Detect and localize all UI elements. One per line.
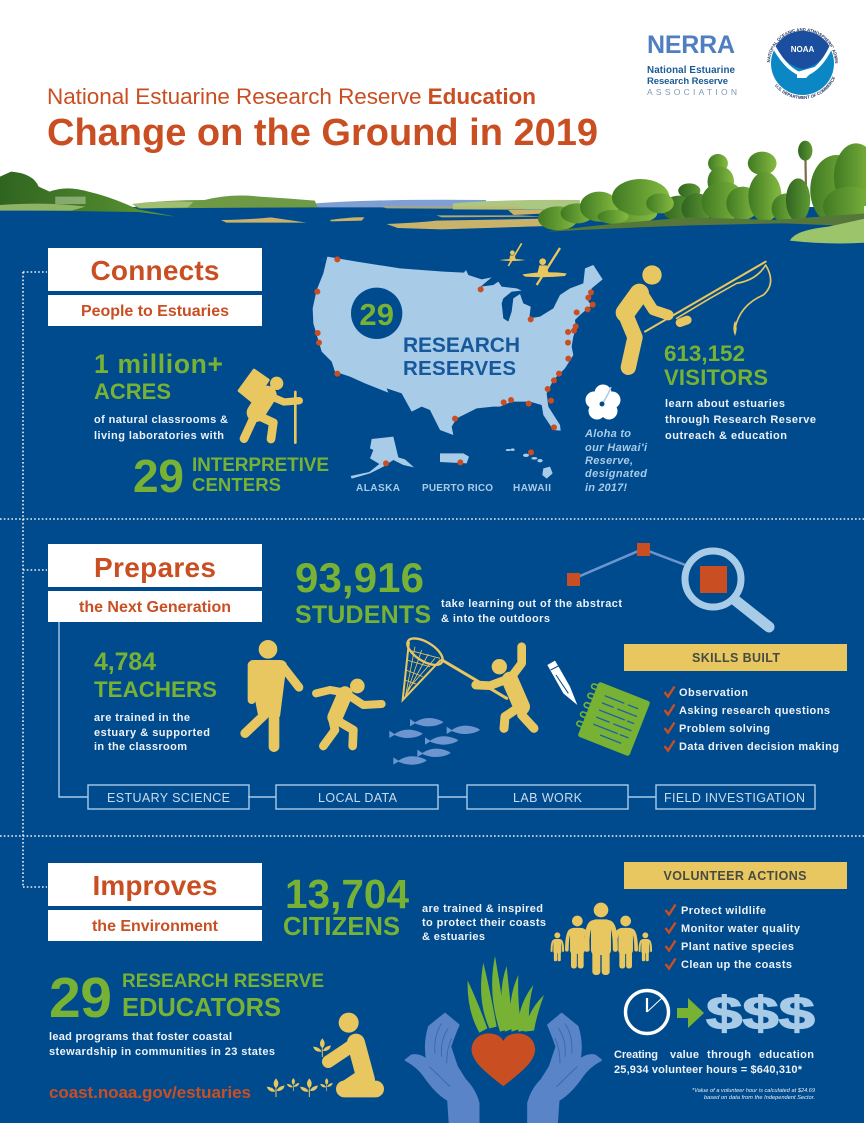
subheading box: the Environment: [48, 910, 262, 941]
process box: Local Data: [276, 785, 438, 809]
process box: Lab Work: LAB WORK: [513, 791, 583, 805]
subheading box: the Environment: the Environment: [92, 918, 219, 935]
text: creating value through education: through: [707, 1049, 751, 1061]
stat: 29 research reserve educators: EDUCATORS: [122, 994, 281, 1022]
29 badge: [351, 288, 402, 339]
text: creating value through education: Creating: [614, 1049, 658, 1061]
icon: right hand: [528, 1014, 601, 1125]
subheading box: People to Estuaries: People to Estuaries: [81, 303, 229, 320]
stat: 13,704 citizens: are trained & inspired: [422, 903, 543, 915]
text: Aloha to our Hawai'i Reserve: in 2017!: [585, 482, 627, 494]
flow: education process boxes: [59, 622, 815, 809]
map: Alaska, Puerto Rico, Hawaii insets: [351, 437, 553, 494]
stat: 4,784 teachers: 4,784: [94, 649, 156, 676]
icon: hibiscus flower: [586, 384, 620, 420]
NOAA logo: [767, 28, 838, 99]
icon: school of fish: [389, 718, 480, 765]
stat: 4,784 teachers: TEACHERS: [94, 677, 217, 702]
stat: 13,704 citizens: CITIZENS: [283, 913, 400, 941]
stat: 29 research reserve educators: lead programs that foster coastal: [49, 1031, 232, 1043]
stat: 13,704 citizens: & estuaries: [422, 931, 485, 943]
list: skills built: Problem solving: [679, 723, 770, 735]
heading box: Prepares: Prepares: [94, 552, 216, 583]
stat: 13,704 citizens: [283, 871, 546, 943]
box: Skills Built heading: [624, 644, 847, 671]
stat: 4,784 teachers: estuary & supported: [94, 727, 210, 739]
panel: Prepares: [48, 544, 262, 622]
text: creating value through education: 25,934 volunteer hours = $640,310*: [614, 1064, 803, 1076]
heading box: Prepares: [48, 544, 262, 587]
illustration: teacher and students in the field: [245, 633, 650, 765]
stat: 29 research reserve educators: [49, 966, 324, 1058]
box: Volunteer Actions heading: [624, 862, 847, 889]
stat: 613,152 visitors: through Research Reserve: [665, 414, 816, 426]
stat: 1 million+ acres: ACRES: [94, 379, 171, 404]
stat: 4,784 teachers: [94, 649, 217, 753]
stat: 4,784 teachers: are trained in the: [94, 712, 190, 724]
stat: 93,916 students: STUDENTS: [295, 601, 431, 629]
footnote: *Value of a volunteer hour is calculated at $24.69: [692, 1088, 815, 1094]
icon: kayakers: [499, 243, 567, 285]
list: skills built: Asking research questions: [679, 705, 830, 717]
stat: 613,152 visitors: learn about estuaries: [665, 398, 785, 410]
text: Aloha to our Hawai'i Reserve: [584, 428, 648, 494]
NERRA logo: [647, 31, 737, 97]
text: Aloha to our Hawai'i Reserve: our Hawai'i: [585, 442, 648, 454]
icon: clock: [626, 990, 668, 1034]
list: skills built: Observation: [679, 687, 748, 699]
stat: 13,704 citizens: 13,704: [285, 871, 409, 917]
stat: 29 research reserve educators: 29: [49, 966, 112, 1030]
subheading box: People to Estuaries: [48, 295, 262, 326]
stat: 613,152 visitors: VISITORS: [664, 365, 768, 390]
29 badge: 29: [359, 297, 394, 332]
icon: hiker: [239, 370, 299, 443]
NOAA logo: U.S. DEPARTMENT OF COMMERCE: [775, 76, 836, 99]
list: volunteer actions: Plant native species: [681, 941, 794, 953]
stat: 613,152 visitors: [664, 341, 816, 442]
map: Alaska, Puerto Rico, Hawaii insets: ALASKA: [356, 483, 400, 494]
icon: clock to dollars: [626, 987, 815, 1039]
NERRA logo: National Estuarine: [647, 65, 736, 76]
icon: person fishing: [625, 262, 771, 367]
footnote: [692, 1088, 815, 1101]
stat: 1 million+ acres: [94, 349, 228, 442]
process box: Lab Work: [467, 785, 628, 809]
stat: 613,152 visitors: 613,152: [664, 341, 745, 366]
title block: [47, 84, 598, 154]
process box: Local Data: LOCAL DATA: [318, 791, 398, 805]
stat: 1 million+ acres: of natural classrooms &: [94, 414, 228, 426]
icon: grass: [468, 956, 544, 1033]
stat: 29 interpretive centers: CENTERS: [192, 474, 281, 495]
stat: 4,784 teachers: in the classroom: [94, 741, 187, 753]
title block: Change on the Ground in 2019: [47, 112, 598, 154]
stat: 13,704 citizens: to protect their coasts: [422, 917, 546, 929]
process box: Field Investigation: FIELD INVESTIGATION: [664, 791, 805, 805]
NERRA logo: NERRA: [647, 31, 735, 59]
stat: 1 million+ acres: 1 million+: [94, 349, 223, 379]
icon: hands holding heart and grass: [406, 956, 601, 1125]
process box: Estuary Science: [88, 785, 249, 809]
panel: Improves: [48, 863, 262, 941]
icon: left hand: [406, 1014, 478, 1125]
heading box: Improves: [48, 863, 262, 906]
icon: running student: [316, 679, 382, 746]
map: United States research reserves: RESERVES: [403, 357, 516, 380]
dollar signs: $$$: [706, 987, 815, 1039]
chart: data line and magnifying glass: [567, 543, 769, 627]
icon: dip net: [403, 633, 507, 700]
panel: Connects: [48, 248, 262, 326]
icon: heart: [471, 1033, 536, 1087]
stat: 29 interpretive centers: INTERPRETIVE: [192, 455, 329, 476]
box: Volunteer Actions heading: VOLUNTEER ACTIONS: [664, 869, 806, 883]
NERRA logo: ASSOCIATION: [647, 87, 737, 97]
stat: 29 interpretive centers: 29: [133, 450, 184, 502]
subheading box: the Next Generation: the Next Generation: [79, 599, 231, 616]
text: Aloha to our Hawai'i Reserve: Reserve,: [585, 455, 633, 467]
box: Skills Built heading: SKILLS BUILT: [692, 651, 780, 665]
text: creating value through education: [614, 1049, 814, 1076]
stat: 93,916 students: [295, 554, 622, 629]
list: skills built: Data driven decision making: [679, 741, 839, 753]
link: coast.noaa.gov/estuaries: coast.noaa.gov/estuaries: [49, 1083, 251, 1102]
process box: Estuary Science: ESTUARY SCIENCE: [107, 791, 230, 805]
stat: 29 interpretive centers: [133, 450, 329, 502]
heading box: Connects: Connects: [90, 255, 220, 286]
map: Alaska, Puerto Rico, Hawaii insets: HAWAII: [513, 483, 551, 494]
stat: 29 research reserve educators: stewardship in communities in 23 states: [49, 1046, 275, 1058]
NERRA logo: Research Reserve: [647, 76, 728, 87]
NOAA logo: NOAA: [791, 45, 814, 54]
text: Aloha to our Hawai'i Reserve: Aloha to: [584, 428, 631, 440]
icon: teacher: [245, 640, 299, 747]
map: United States research reserves: RESEARCH: [403, 334, 520, 357]
process box: Field Investigation: [656, 785, 815, 809]
stat: 93,916 students: take learning out of the abstract: [441, 598, 622, 610]
stat: 93,916 students: 93,916: [295, 554, 424, 601]
subheading box: the Next Generation: [48, 591, 262, 622]
reserve location dots: [314, 256, 596, 430]
title block: National Estuarine Research Reserve Education: [47, 84, 536, 109]
icon: green notepad: [573, 680, 650, 756]
icon: student with net: [476, 647, 534, 728]
map: Alaska, Puerto Rico, Hawaii insets: PUERTO RICO: [422, 483, 493, 494]
text: creating value through education: education: [759, 1049, 814, 1061]
text: creating value through education: value: [670, 1049, 699, 1061]
stat: 29 research reserve educators: RESEARCH RESERVE: [122, 971, 324, 992]
list: volunteer actions: [666, 904, 801, 971]
heading box: Connects: [48, 248, 262, 291]
list: skills built: [664, 686, 839, 753]
list: volunteer actions: Clean up the coasts: [681, 959, 792, 971]
list: volunteer actions: Protect wildlife: [681, 905, 766, 917]
icon: family group: [552, 903, 651, 975]
map: United States research reserves: [313, 256, 603, 435]
arrow: [677, 998, 704, 1028]
icon: kneeling person planting: [267, 1013, 384, 1097]
heading box: Improves: Improves: [92, 870, 218, 901]
footnote: based on data from the Independent Sector.: [704, 1095, 815, 1101]
stat: 613,152 visitors: outreach & education: [665, 430, 787, 442]
stat: 1 million+ acres: living laboratories with: [94, 430, 224, 442]
text: Aloha to our Hawai'i Reserve: designated: [585, 468, 647, 480]
stat: 93,916 students: & into the outdoors: [441, 613, 550, 625]
icon: pencil: [547, 661, 577, 705]
list: volunteer actions: Monitor water quality: [681, 923, 801, 935]
